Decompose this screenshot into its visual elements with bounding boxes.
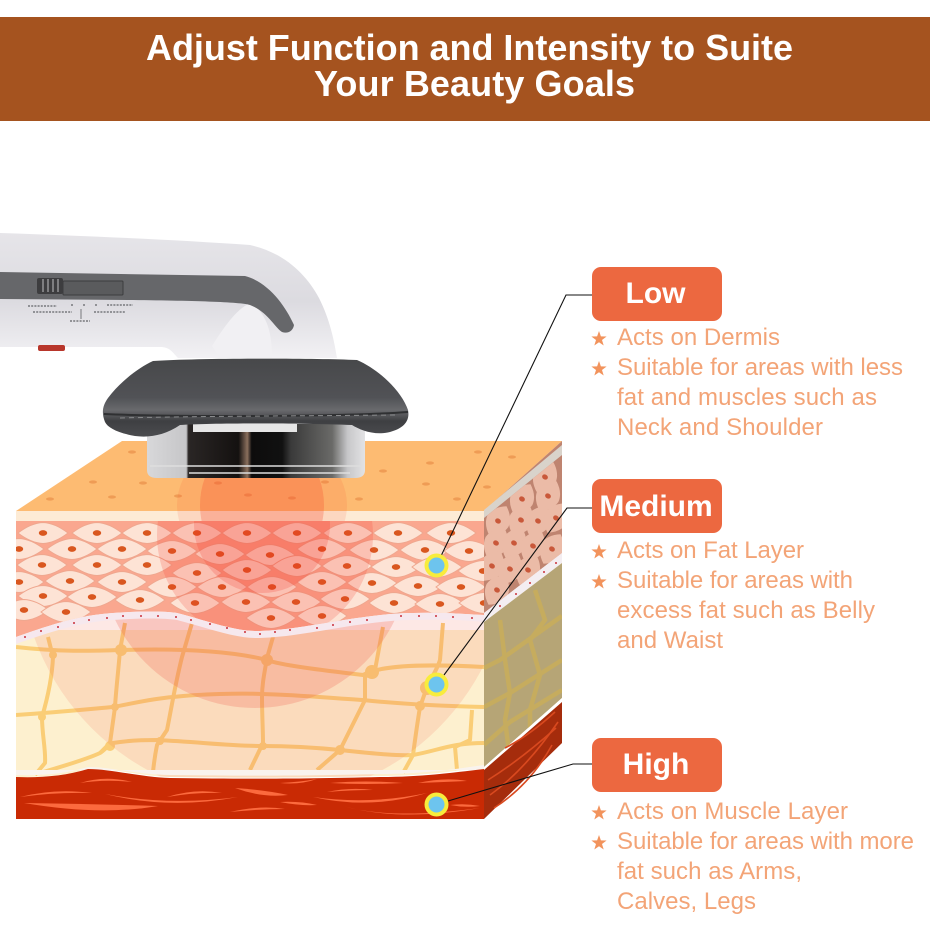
icon: star [591,805,607,820]
icon: star [591,574,607,588]
connector line: medium [444,508,592,675]
red button [38,345,65,351]
text: suitable areas: excess fat such as Belly [617,597,875,624]
text: suitable areas: Neck and Shoulder [617,414,823,441]
text: suitable areas: fat and muscles such as [617,384,877,411]
callout: high [424,738,914,915]
text: suitable areas: Suitable for areas with less [617,354,903,381]
title: Adjust Function and Intensity to Suite [146,27,793,68]
label pill: high [592,738,722,792]
label pill: high: High [623,748,689,781]
muscle layer [16,765,484,819]
skin top surface [16,441,562,511]
marker dot: low [424,554,448,578]
title [146,27,793,104]
side face: fat [484,563,562,771]
text: acts on muscle layer: Acts on Muscle Layer [617,798,848,825]
heat waves [34,478,484,778]
text: acts on dermis: Acts on Dermis [617,324,780,351]
device: massager head [0,233,408,478]
icon: star [591,544,607,558]
text: suitable areas [617,567,875,654]
handle highlight [212,303,272,358]
fat layer [16,623,484,780]
icon: star [591,361,607,376]
dermis layer with cells [16,511,484,637]
skin cross-section diagram [0,310,575,819]
connector line: low [441,295,592,556]
text: suitable areas: and Waist [617,627,723,654]
membrane strip [16,612,484,644]
handle [0,233,337,358]
marker dot: high [424,792,448,816]
label pill: low: Low [626,277,686,310]
tiny mode markings [28,305,133,321]
callout: low [424,267,903,578]
callout: medium [424,479,875,696]
icon: star [591,331,607,346]
text: acts on fat layer: Acts on Fat Layer [617,537,804,564]
text: suitable areas [617,828,914,915]
side face: dermis [484,441,562,622]
grey stripe [0,272,294,333]
label pill: medium: Medium [599,490,713,523]
text: suitable areas: fat such as Arms, [617,858,802,885]
header banner [0,17,930,121]
text: suitable areas: Calves, Legs [617,888,756,915]
text: suitable areas: Suitable for areas with more [617,828,914,855]
label pill: medium [592,479,722,533]
icon: star [591,835,607,850]
slider switch [37,278,123,295]
connector line: high [448,764,592,801]
title: Your Beauty Goals [314,63,635,104]
text: suitable areas [617,354,903,441]
side face: muscle [484,702,562,819]
chrome head [147,424,365,478]
marker dot: medium [424,672,448,696]
text: suitable areas: Suitable for areas with [617,567,853,594]
label pill: low [592,267,722,321]
dark disc [103,359,408,437]
